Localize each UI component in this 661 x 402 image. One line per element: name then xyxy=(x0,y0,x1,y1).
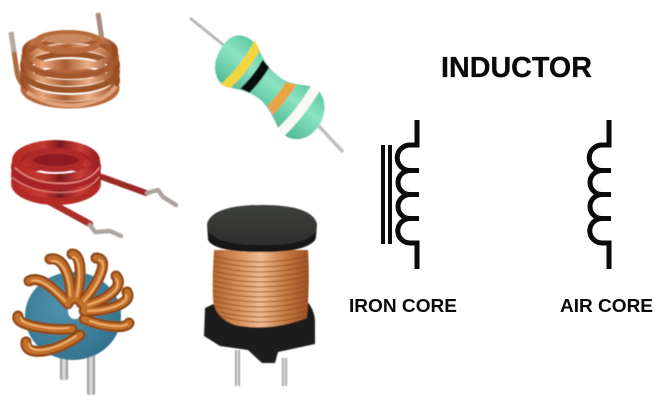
label: iron core: IRON CORE xyxy=(349,295,457,316)
black band xyxy=(240,60,271,95)
label: air core: AIR CORE xyxy=(560,295,653,316)
photo: bare copper air-core coil xyxy=(11,13,117,105)
photo: toroidal inductor xyxy=(18,254,129,395)
air core inductor symbol xyxy=(589,120,611,269)
photo: colour-banded bead inductor xyxy=(190,18,343,152)
white band xyxy=(276,84,322,137)
title: INDUCTOR xyxy=(441,52,592,84)
orange band xyxy=(265,79,297,116)
photo: red enamelled wire coil xyxy=(13,144,176,236)
photo: drum-core power inductor xyxy=(204,205,317,386)
iron core bars xyxy=(383,145,390,244)
iron core inductor symbol xyxy=(383,120,419,269)
yellow band xyxy=(220,41,264,92)
